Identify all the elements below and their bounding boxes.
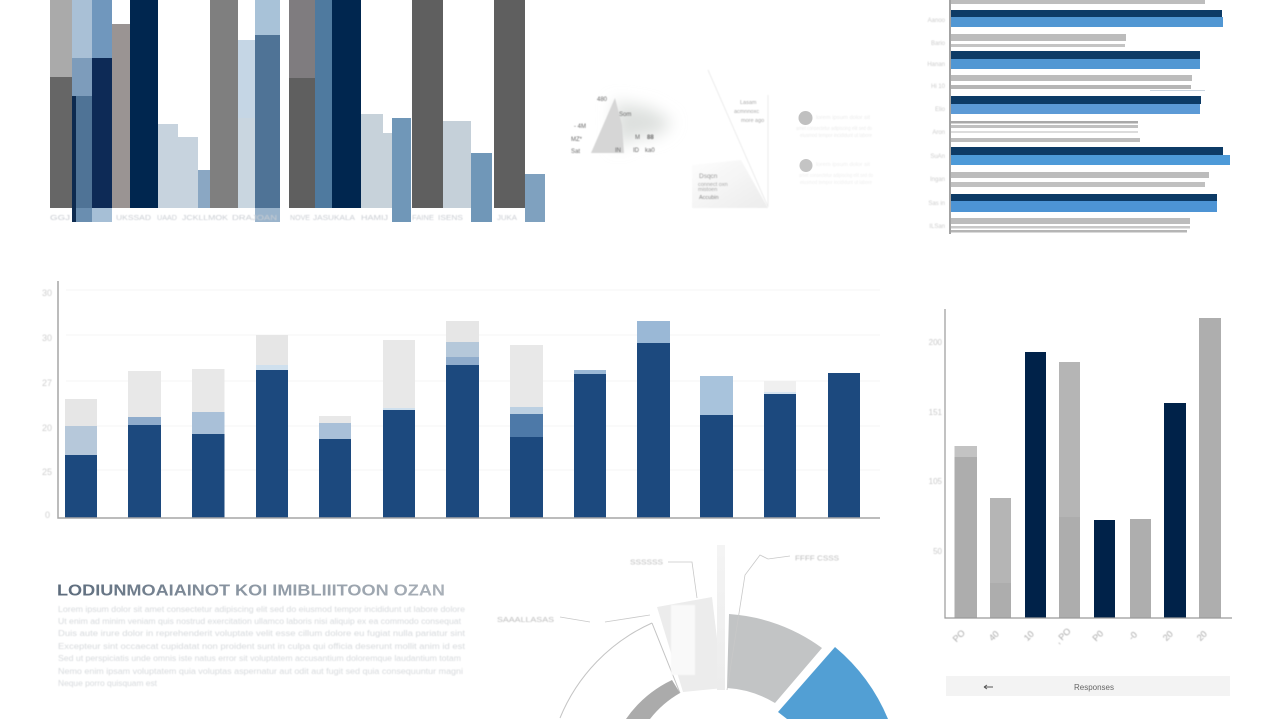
donut labels: FFFF CSSS [795, 556, 839, 562]
y axis labels [42, 288, 52, 520]
thin outer arc [560, 623, 680, 718]
blue segment [778, 647, 888, 719]
y axis labels: 27 [42, 378, 52, 388]
y axis labels: 30 [42, 288, 52, 298]
top-left chart axis labels: HAMIJ [361, 213, 388, 222]
top-right chart row labels: SuAn [930, 154, 945, 160]
x labels: 20 [1161, 629, 1175, 643]
top-left chart axis labels: JASUKALA [313, 213, 355, 222]
callout: two grey bullets with faint notes [796, 111, 873, 186]
top-left chart axis labels: ISENS [438, 213, 463, 222]
top-right chart row labels: Aron [932, 130, 945, 136]
note one: amet consectetur adipiscing elit sed do [796, 126, 872, 132]
diagram: slanted funnel with captions: mistoen [698, 187, 717, 193]
top-right chart row labels: ILSan [929, 224, 945, 230]
y axis labels: 30 [42, 333, 52, 343]
grey segment [727, 614, 822, 703]
dark grey inner band [626, 680, 680, 719]
diagram: slanted funnel with captions: acmnnoxc [734, 109, 759, 115]
text block: body paragraph: Neque porro quisquam est [58, 679, 158, 688]
text block: body paragraph: Duis aute irure dolor in reprehenderit voluptate velit esse cillum dolore eu fugiat nulla pariatur sint [58, 629, 466, 638]
column stacks [65, 321, 860, 518]
top-right chart row labels: Hi 10 [931, 84, 946, 90]
top-left chart axis labels: UKSSAD [116, 213, 152, 222]
diagram: shaded triangle with small labels: Sat [571, 149, 580, 155]
diagram: slanted funnel with captions [692, 70, 768, 208]
top-right chart row labels: Ingan [930, 177, 945, 183]
diagram: shaded triangle with small labels [571, 97, 672, 155]
x labels: 40 [987, 629, 1001, 643]
y labels [929, 338, 943, 556]
top-left chart axis labels: JCKLLMOK [182, 213, 228, 222]
icon: legend arrow [984, 685, 993, 689]
top-right chart row labels: Aanoo [928, 18, 946, 24]
diagram: shaded triangle with small labels: 88 [647, 135, 654, 141]
diagram: slanted funnel with captions: connect oxn [698, 182, 728, 188]
top-left chart axis labels [50, 213, 517, 222]
y labels: 105 [929, 477, 943, 486]
icon: first bullet [798, 111, 812, 125]
diagram: shaded triangle with small labels: M [635, 135, 640, 141]
gridlines [66, 290, 880, 470]
x labels: 20 [1195, 629, 1209, 643]
legend bar [946, 676, 1230, 696]
diagram: slanted funnel with captions: Lasam [740, 100, 757, 106]
donut labels [497, 556, 839, 624]
top-left chart axis labels: JUKA [497, 213, 517, 222]
top-right chart row labels: Hanan [927, 62, 945, 68]
top-left chart axis labels: GGJ [50, 213, 70, 222]
y labels: 151 [929, 408, 943, 417]
note one: eiusmod tempor incididunt ut labore [800, 133, 872, 139]
y axis labels: 25 [42, 467, 52, 477]
icon: second bullet [800, 159, 812, 172]
legend label: Responses [1074, 683, 1114, 692]
diagram: shaded triangle with small labels: ID [633, 148, 640, 154]
text block: body paragraph: Sed ut perspiciatis unde omnis iste natus error sit voluptatem accusantium doloremque laudantium totam [58, 654, 461, 663]
diagram: shaded triangle with small labels: ka0 [645, 148, 655, 154]
diagram: shaded triangle with small labels: - 4M [574, 124, 586, 130]
note two: lorem ipsum dolor sit [816, 162, 871, 168]
text block: body paragraph: Nemo enim ipsam voluptatem quia voluptas aspernatur aut odit aut fugit sed quia consequuntur magni [58, 667, 463, 676]
columns [954, 318, 1221, 618]
chart: partial donut [497, 545, 888, 719]
diagram: slanted funnel with captions: more ago [741, 118, 764, 124]
y axis labels: 0 [45, 510, 50, 520]
pale vertical bar [717, 545, 725, 690]
donut labels: SSSSSS [630, 560, 663, 566]
x labels: , PO [1053, 626, 1073, 646]
top-right chart row labels: Sas in [928, 201, 945, 207]
y axis labels: 20 [42, 423, 52, 433]
diagram: shaded triangle with small labels: IN [615, 148, 621, 154]
x labels: 10 [1022, 629, 1036, 643]
y labels: 200 [929, 338, 943, 347]
chart: top-right horizontal bars [949, 0, 1230, 234]
top-right chart row labels: Elio [935, 107, 946, 113]
axes [945, 309, 1232, 618]
top-left chart axis labels: FAINE [412, 213, 434, 222]
diagram: shaded triangle with small labels: 480 [597, 97, 608, 103]
x labels: PO [951, 628, 967, 644]
donut labels: SAAALLASAS [497, 617, 554, 624]
x labels: P0 [1090, 628, 1105, 643]
top-left chart axis labels: DRAJOAN [232, 213, 277, 222]
note one [796, 115, 872, 139]
text block: body paragraph: Ut enim ad minim veniam quis nostrud exercitation ullamco laboris nisi aliquip ex ea commodo consequat [58, 617, 462, 626]
leader lines [560, 555, 790, 690]
top-left chart axis labels: NOVE [290, 213, 310, 222]
chart: main stacked column chart [42, 281, 880, 520]
chart: bottom-right column chart [929, 309, 1232, 646]
x labels: -0 [1127, 630, 1139, 642]
title: LODIUNMOAIAINOT KOI IMIBLIIITOON OZAN [57, 582, 445, 600]
diagram: shaded triangle with small labels: MZ* [571, 137, 583, 143]
y labels: 50 [933, 547, 943, 556]
text block: body paragraph [58, 605, 466, 688]
note two: eiusmod tempor incididunt ut labore [800, 180, 872, 186]
top-left chart axis labels: UAAD [157, 213, 178, 222]
chart: top-left overlapping bars, group one [50, 0, 280, 222]
diagram: shaded triangle with small labels: Som [619, 112, 631, 118]
text block: body paragraph: Lorem ipsum dolor sit amet consectetur adipiscing elit sed do eiusmod tempor incididunt ut labore dolore [58, 605, 466, 614]
diagram: slanted funnel with captions: Dsqcn [699, 173, 718, 180]
text block: body paragraph: Excepteur sint occaecat cupidatat non proident sunt in culpa qui officia deserunt mollit anim id est [58, 642, 466, 651]
note two [799, 162, 873, 186]
note two: amet consectetur adipiscing elit sed do [799, 173, 873, 179]
top-right chart row labels: Bario [931, 41, 946, 47]
axes [58, 281, 880, 518]
diagram: slanted funnel with captions: Accubin [699, 195, 719, 201]
chart: top-left overlapping bars, group two [289, 0, 545, 222]
note one: lorem ipsum dolor sit [816, 115, 871, 121]
pale segment [657, 597, 723, 692]
top-right chart row labels [927, 18, 946, 230]
x labels [951, 626, 1209, 646]
